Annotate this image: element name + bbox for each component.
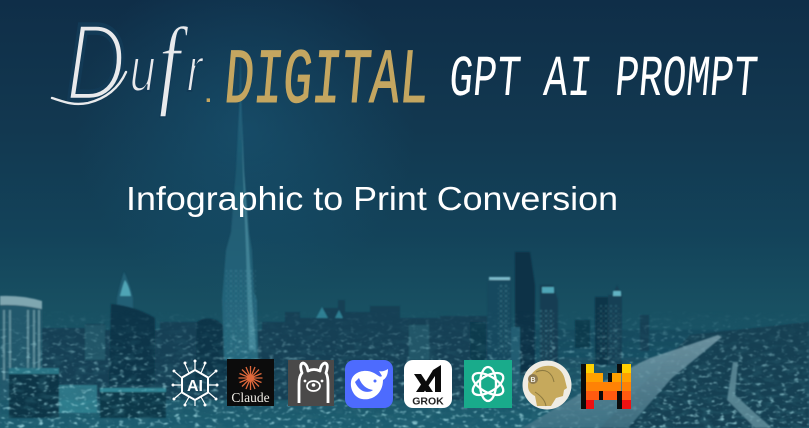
- foreground left: [100, 388, 166, 418]
- photo grain / city lights: [0, 310, 809, 428]
- right towers: [487, 277, 512, 362]
- logo: DIGITAL: DIGITAL: [221, 38, 433, 126]
- left tall building: [0, 296, 42, 400]
- icon: Grok: GROK: [412, 396, 444, 408]
- icon: portrait: B: [530, 377, 536, 384]
- icon: Ollama llama: [288, 360, 334, 406]
- logo: Dufr script: [52, 0, 205, 124]
- icon: AI chip: AI: [187, 378, 203, 395]
- icon: AI chip: [172, 360, 218, 406]
- logo: Dufr script: f: [159, 8, 189, 119]
- dome tower: [117, 272, 133, 312]
- logo: Dufr script: D: [66, 0, 126, 124]
- highway: [522, 335, 722, 428]
- logo: Dufr script: u: [130, 34, 156, 105]
- logo: period: .: [205, 81, 212, 108]
- dark curved buildings: [109, 304, 155, 385]
- Burj tower: [222, 45, 258, 360]
- right distant land: [600, 322, 809, 428]
- subtitle: Infographic to Print Conversion: [126, 180, 618, 217]
- icon: Grok: [404, 360, 452, 408]
- icon: DeepSeek whale: [345, 360, 393, 408]
- far skyline: [0, 300, 490, 400]
- icon: Mistral: [581, 364, 631, 409]
- logo: Dufr script: r: [187, 34, 205, 105]
- icon: Claude: Claude: [231, 390, 270, 405]
- icon: ChatGPT: [464, 360, 512, 408]
- low left block: [9, 368, 59, 418]
- icon: Claude: [227, 359, 274, 406]
- icon: portrait: [522, 360, 572, 410]
